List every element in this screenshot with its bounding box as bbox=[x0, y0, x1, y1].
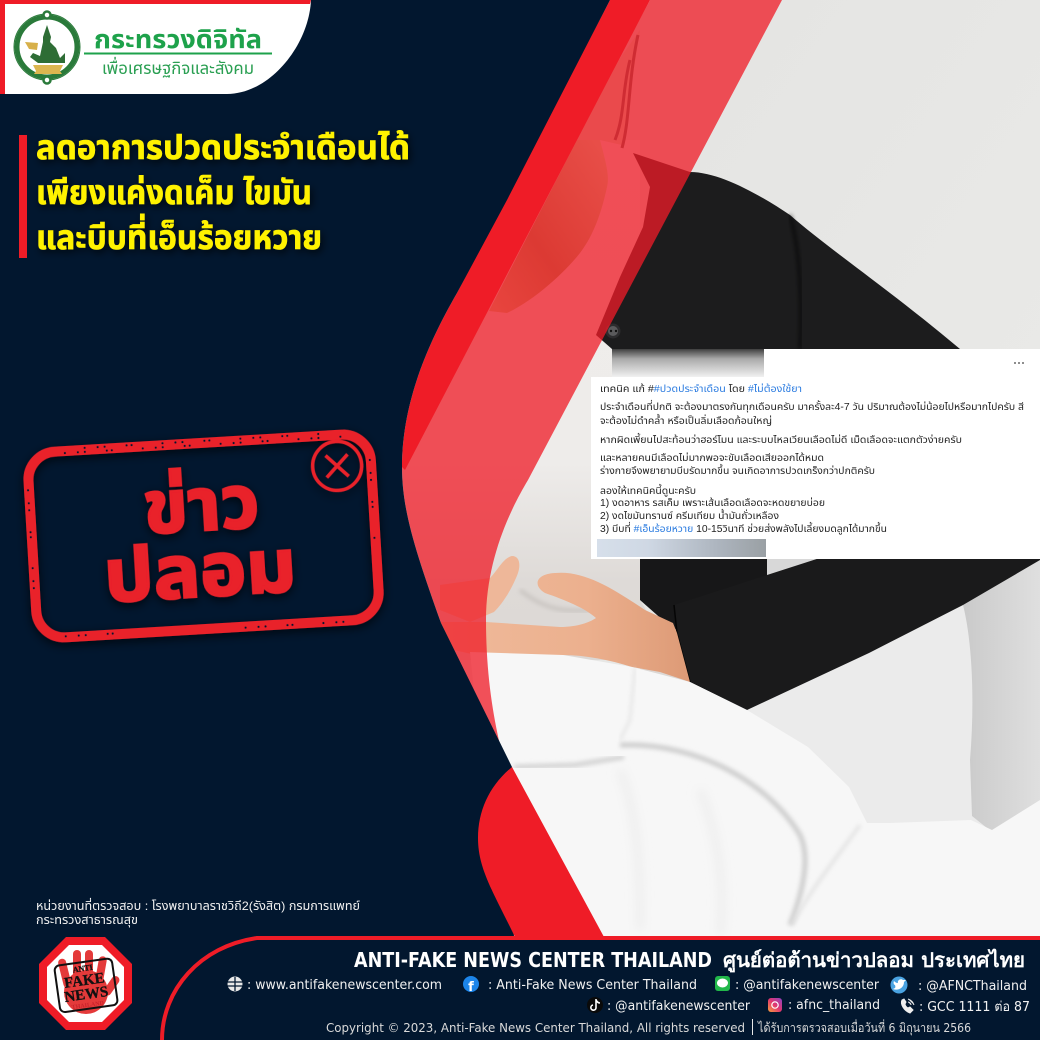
anti-fake news octagon logo bbox=[39, 937, 132, 1030]
contact details: : www.antifakenewscenter.com bbox=[247, 977, 442, 993]
button bbox=[606, 324, 620, 338]
icon: tiktok bbox=[587, 997, 603, 1013]
verification source bbox=[36, 897, 360, 927]
icon: instagram bbox=[768, 998, 782, 1012]
contact details bbox=[247, 977, 1030, 1015]
photo: woman holding lower belly on bed bbox=[400, 0, 1040, 940]
icon: globe bbox=[227, 976, 243, 992]
footer title bbox=[354, 948, 1025, 974]
solid red diagonal band bbox=[402, 0, 650, 470]
copyright line: Copyright © 2023, Anti-Fake News Center Thailand, All rights reserved bbox=[326, 1020, 745, 1035]
verification source: หน่วยงานที่ตรวจสอบ : โรงพยาบาลราชวิถี2(รังสิต) กรมการแพทย์ bbox=[36, 897, 360, 913]
stamp text: ข่าว bbox=[141, 460, 262, 549]
neck shadow inside collar bbox=[489, 140, 608, 313]
headline bbox=[36, 129, 410, 257]
post body text: ประจำเดือนที่ปกติ จะต้องมาตรงกันทุกเดือนครับ มาครั้งละ4-7 วัน ปริมาณต้องไม่น้อยไปหรือมากไปครับ สี bbox=[600, 399, 1024, 413]
stamp lettering: ANTI bbox=[72, 963, 93, 975]
icon: twitter bbox=[890, 976, 908, 994]
stamp icon: cross in circle bbox=[311, 440, 363, 492]
duvet bbox=[470, 652, 1040, 940]
post body text: เทคนิค แก้ # #ปวดประจำเดือน โดย #ไม่ต้องใช้ยา bbox=[600, 382, 802, 395]
contact details: : @antifakenewscenter bbox=[607, 998, 750, 1014]
footer panel bbox=[160, 936, 1040, 1040]
headline: เพียงแค่งดเค็ม ไขมัน bbox=[36, 174, 312, 212]
footer title: ANTI-FAKE NEWS CENTER THAILAND bbox=[354, 948, 712, 972]
ministry name: กระทรวงดิจิทัล bbox=[94, 24, 262, 54]
cardigan body bbox=[596, 153, 1040, 555]
icon: facebook bbox=[463, 976, 479, 995]
pillow bbox=[747, 605, 992, 832]
post body text: ลองให้เทคนิคนี้ดูนะครับ bbox=[600, 483, 696, 497]
hand bbox=[430, 573, 690, 682]
post body text: ร่างกายจึงพยายามบีบรัดมากขึ้น จนเกิดอาการปวดเกร็งกว่าปกติครับ bbox=[600, 463, 875, 477]
social post panel bbox=[591, 349, 1040, 559]
post body text: จะต้องไม่ดำคล้ำ หรือเป็นลิ่มเลือดก้อนใหญ่ bbox=[600, 413, 772, 427]
icon: line bbox=[715, 976, 730, 991]
red hand bbox=[57, 950, 121, 1014]
contact details: : afnc_thailand bbox=[788, 997, 880, 1013]
contact details: : @antifakenewscenter bbox=[735, 977, 879, 993]
headline accent bar bbox=[19, 135, 27, 258]
logo panel: ministry header bbox=[0, 0, 311, 94]
post body text: 1) งดอาหาร รสเค็ม เพราะเส้นเลือดเลือดจะหดขยายบ่อย bbox=[600, 496, 825, 509]
headline: ลดอาการปวดประจำเดือนได้ bbox=[36, 129, 410, 167]
post menu dots bbox=[1014, 362, 1024, 364]
icon: facebook: f bbox=[468, 980, 474, 995]
navy left panel bbox=[0, 0, 610, 940]
stamp lettering: THAILAND bbox=[71, 1000, 105, 1011]
hair strands and upper neck bbox=[577, 30, 640, 148]
post body text: หากผิดเพี้ยนไปสะท้อนว่าฮอร์โมน และระบบไหลเวียนเลือดไม่ดี เม็ดเลือดจะแตกตัวง่ายครับ bbox=[600, 432, 962, 446]
stamp text: ปลอม bbox=[102, 524, 298, 618]
ministry tagline: เพื่อเศรษฐกิจและสังคม bbox=[102, 56, 254, 78]
post body text: และหลายคนมีเลือดไม่มากพอจะขับเลือดเสียออกได้หมด bbox=[600, 451, 824, 464]
icon: phone bbox=[901, 999, 914, 1013]
stamp text bbox=[98, 458, 298, 618]
post body text: 3) บีบที่ #เอ็นร้อยหวาย 10-15วินาที ช่วยส่งพลังไปเลี้ยงมดลูกได้มากขึ้น bbox=[600, 521, 887, 535]
copyright line: ได้รับการตรวจสอบเมื่อวันที่ 6 มิถุนายน 2566 bbox=[757, 1019, 971, 1036]
red curved accent at photo base bbox=[478, 767, 604, 937]
stamp lettering: NEWS bbox=[63, 984, 109, 1006]
torso under panel bbox=[640, 555, 767, 630]
contact details: : Anti-Fake News Center Thailand bbox=[488, 977, 697, 993]
post body text bbox=[600, 382, 1024, 535]
verification source: กระทรวงสาธารณสุข bbox=[36, 913, 138, 927]
translucent red diagonal band bbox=[402, 0, 782, 745]
contact details: : GCC 1111 ต่อ 87 bbox=[919, 999, 1030, 1015]
stamp: fake news bbox=[26, 431, 380, 640]
blurred post footer bbox=[597, 539, 766, 557]
headline: และบีบที่เอ็นร้อยหวาย bbox=[36, 213, 322, 257]
stamp lettering: FAKE bbox=[63, 970, 106, 992]
stamp lettering bbox=[54, 958, 118, 1013]
footer title: ศูนย์ต่อต้านข่าวปลอม ประเทศไทย bbox=[723, 948, 1025, 974]
sleeve bbox=[674, 550, 1040, 710]
copyright line bbox=[326, 1019, 971, 1036]
ministry emblem bbox=[14, 12, 80, 84]
post body text: 2) งดไขมันทรานซ์ ครีมเทียม น้ำมันถั่วเหลือง bbox=[600, 508, 779, 522]
contact details: : @AFNCThailand bbox=[918, 978, 1027, 994]
